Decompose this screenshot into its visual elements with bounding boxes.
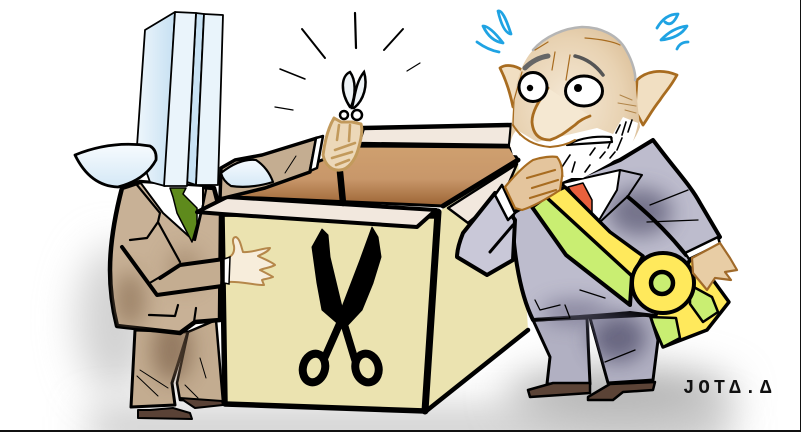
sash rosette [632, 253, 694, 313]
beard [510, 117, 638, 178]
upper sash yellow [545, 187, 643, 276]
shirt cuff right [685, 237, 720, 259]
sweat drops [477, 11, 688, 52]
hair [533, 27, 635, 80]
left eye [519, 72, 547, 102]
president [457, 140, 729, 400]
cuff [310, 136, 323, 171]
shoes [528, 383, 590, 397]
box right flap [448, 164, 517, 223]
large scissors on box [300, 227, 382, 385]
jacket torso [513, 140, 720, 320]
box front face [222, 214, 438, 411]
lapels and jacket details [130, 185, 206, 322]
trouser legs [533, 318, 590, 384]
right eyebrow [575, 56, 603, 75]
box back flap [358, 125, 512, 146]
box right face [425, 160, 528, 412]
box [197, 125, 528, 412]
hand on chin [495, 157, 562, 220]
burst lines [275, 13, 420, 110]
green tie [170, 188, 197, 242]
jacket [110, 182, 221, 333]
president head [510, 27, 640, 178]
hand holding scissors [323, 118, 362, 170]
shoes [138, 408, 192, 419]
mouth [567, 137, 612, 145]
raised arm sleeve [457, 193, 515, 275]
right ear [221, 160, 273, 187]
small scissors held up [340, 72, 366, 120]
red tie [568, 183, 592, 217]
nose [532, 88, 590, 140]
center tape line [340, 172, 343, 203]
left eyebrow [525, 56, 548, 68]
suit shading [541, 188, 672, 362]
president ears [500, 66, 677, 125]
hand on box [224, 237, 275, 285]
lapel, arm and sleeve lines [600, 170, 642, 240]
shirt [563, 170, 620, 222]
box front corner edge [425, 212, 438, 411]
face contour [513, 38, 620, 135]
man with building head: suit body [110, 182, 224, 419]
box interior [227, 146, 518, 206]
upper sash green [532, 196, 632, 305]
shirt [140, 182, 203, 240]
trouser legs [131, 330, 188, 407]
stubble [560, 120, 632, 172]
building head [137, 12, 223, 186]
right eye [566, 76, 602, 106]
man with building head: raised arm [220, 136, 323, 199]
president right hand [692, 243, 737, 290]
lower sash [650, 258, 729, 347]
left ear [75, 144, 156, 187]
box front flap [197, 197, 436, 227]
signature: JOTΔ.Δ [683, 377, 775, 399]
sleeve of lower arm [122, 247, 224, 295]
